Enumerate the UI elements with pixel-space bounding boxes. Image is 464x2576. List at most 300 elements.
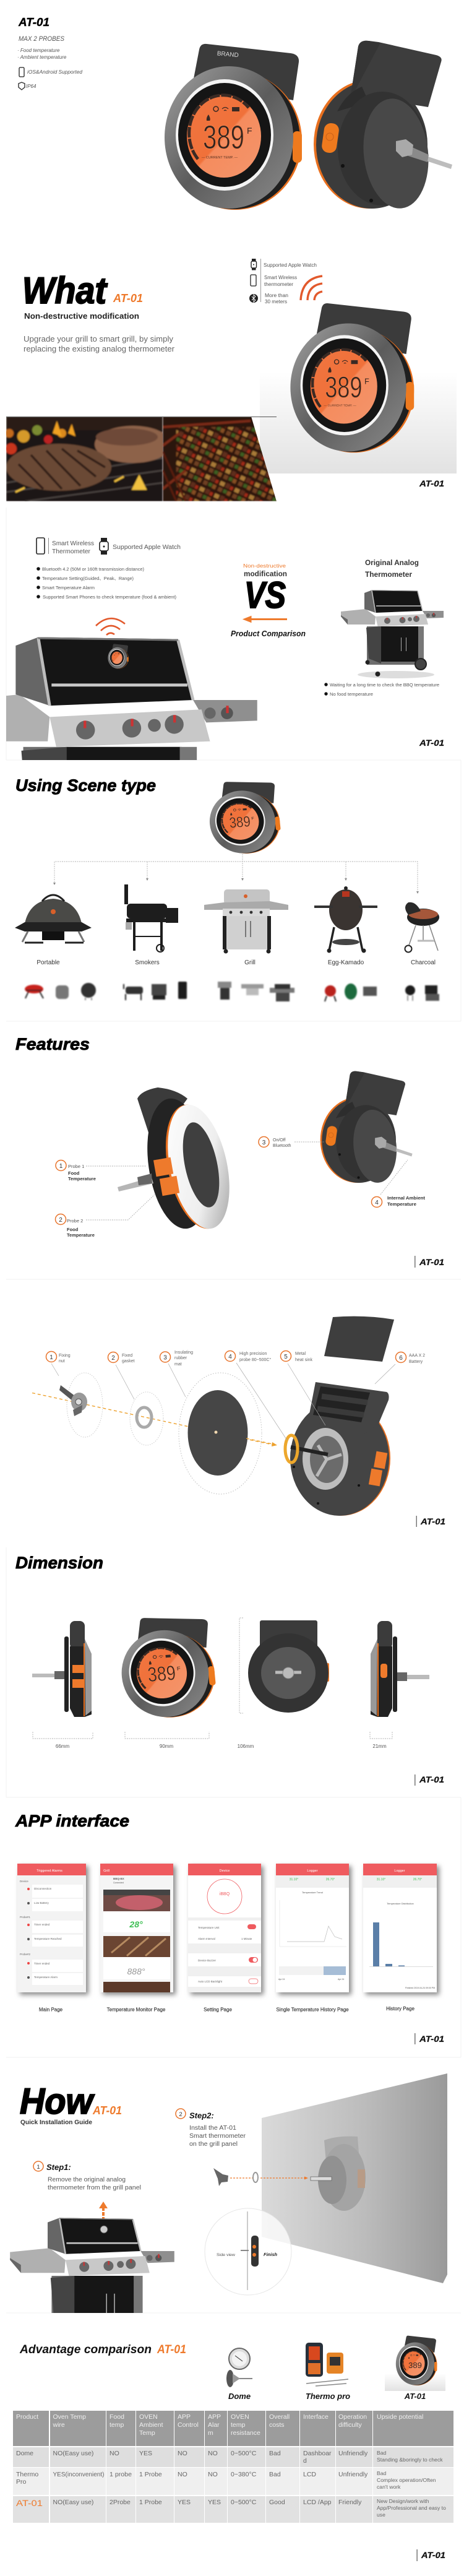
step 1: Step1: xyxy=(46,2163,71,2172)
row: thermo pro: Pro xyxy=(16,2478,26,2486)
divider and feature text xyxy=(260,259,317,305)
row: dome: NO xyxy=(178,2450,187,2457)
heading: Thermometer xyxy=(365,571,413,579)
callout: ambient xyxy=(371,1160,426,1207)
row: dome: d xyxy=(303,2457,307,2465)
bullet list: Waiting for a long time to check the BBQ temperature xyxy=(330,683,439,688)
heading: What xyxy=(22,270,108,311)
bullet list: Smart Temperature Alarm xyxy=(42,585,95,590)
leader lines xyxy=(51,1363,395,1440)
callout labels: Metal xyxy=(295,1352,306,1356)
row: dome: 0~500°C xyxy=(231,2450,257,2457)
icon: bluetooth xyxy=(249,294,258,303)
table header: wire xyxy=(52,2421,65,2429)
label: model tag: AT-01 xyxy=(419,738,444,748)
icon: watch xyxy=(100,538,108,555)
step 1: thermometer from the grill panel xyxy=(48,2185,141,2191)
step 2: 2 xyxy=(179,2111,183,2118)
table header: Oven Temp xyxy=(53,2413,86,2421)
screen captions: Setting Page xyxy=(204,2007,232,2013)
VS: VS xyxy=(244,574,286,616)
row: at-01: YES xyxy=(178,2499,191,2506)
row: dome: Bad xyxy=(377,2450,387,2456)
orange caption: Non-destructive xyxy=(243,563,286,569)
label: model tag xyxy=(415,1256,444,1268)
screen: single history page: Temperature Trend xyxy=(302,1891,323,1894)
step 1: Remove the original analog xyxy=(48,2176,126,2184)
screen: setting page xyxy=(188,1864,264,1995)
product names xyxy=(228,2392,426,2401)
row: thermo pro: Thermo xyxy=(16,2471,38,2478)
thermometer: F xyxy=(251,816,254,821)
label: model tag: AT-01 xyxy=(420,1516,445,1526)
panel: dimension xyxy=(15,1554,444,1786)
callout labels: nut xyxy=(59,1359,65,1364)
screen: setting page: Device xyxy=(220,1869,230,1873)
grill labels: Portable xyxy=(37,959,60,966)
screen: temperature monitor page: 888° xyxy=(127,1966,145,1976)
callout labels: probe 80~500C° xyxy=(239,1357,271,1362)
callout: on off xyxy=(259,1136,325,1148)
table header: difficulty xyxy=(338,2421,362,2429)
callout labels: heat sink xyxy=(295,1358,313,1362)
row: at-01: AT-01 xyxy=(16,2498,43,2508)
panel: features xyxy=(15,1035,444,1268)
divider and feature text: Smart Wireless xyxy=(264,275,297,280)
table header: Interface xyxy=(303,2413,329,2421)
screen: main page: Probe#1 xyxy=(20,1916,31,1919)
label: model tag: AT-01 xyxy=(419,1774,444,1784)
temperature reading: 389 xyxy=(203,119,244,156)
screen captions: Single Temperature History Page xyxy=(276,2007,349,2013)
table header: Food xyxy=(110,2413,124,2421)
feature names: Smart Wireless xyxy=(52,540,94,547)
row: at-01: Good xyxy=(269,2499,285,2506)
view: front xyxy=(116,1613,218,1721)
photo: steak on grill xyxy=(5,417,171,501)
grill labels xyxy=(37,959,436,966)
panel: advantage comparison xyxy=(13,2336,453,2561)
label: model tag: AT-01 xyxy=(421,2550,445,2560)
screen: setting page: Device Buzzer xyxy=(198,1959,217,1962)
screen: temperature monitor page: Connected xyxy=(113,1882,124,1884)
row: thermo pro xyxy=(13,2468,453,2495)
row: at-01: YES xyxy=(208,2499,221,2506)
callout labels: 4 xyxy=(228,1354,232,1360)
heading: Dimension xyxy=(15,1554,103,1572)
screen: single history page: Apr 24 xyxy=(278,1978,285,1981)
screen: single history page xyxy=(276,1864,351,1995)
row: at-01: Friendly xyxy=(338,2499,362,2506)
heading: Using Scene type xyxy=(15,776,156,795)
panel: versus xyxy=(231,563,306,638)
product: dome xyxy=(226,2348,252,2387)
row: at-01: 0~500°C xyxy=(231,2499,257,2506)
arrow up xyxy=(99,2202,108,2224)
temperature reading: 389 xyxy=(325,371,363,404)
row: dome xyxy=(13,2447,453,2467)
grill labels: Grill xyxy=(244,959,256,966)
row: thermo pro: NO xyxy=(178,2471,187,2478)
table header: APP xyxy=(178,2413,191,2421)
callout: probe 1 xyxy=(56,1160,147,1182)
comparison table xyxy=(13,2411,453,2523)
step 2: Smart thermometer xyxy=(189,2133,246,2140)
grill: gas xyxy=(204,889,288,953)
row: at-01: App/Professional and easy to xyxy=(377,2505,446,2511)
illustration: grill xyxy=(341,590,444,678)
callout labels: AAA X 2 xyxy=(409,1354,425,1358)
measurement labels xyxy=(56,1744,387,1749)
screen: setting page: iBBQ xyxy=(220,1892,230,1896)
step 2 xyxy=(176,2109,246,2148)
row: at-01: New Design/work with xyxy=(377,2498,429,2504)
model tag: AT-01 xyxy=(92,2104,122,2117)
screen: history page: 26.70° xyxy=(413,1878,422,1882)
callout: on off: On/Off xyxy=(273,1138,286,1143)
screen: main page: Triggered Alarms xyxy=(37,1869,62,1873)
measurement labels: 21mm xyxy=(372,1744,387,1749)
row: thermo pro: Bad xyxy=(377,2470,387,2476)
divider and feature text: 30 meters xyxy=(265,299,287,305)
screen captions: History Page xyxy=(386,2006,415,2012)
view: right side xyxy=(371,1621,429,1717)
label: model tag xyxy=(416,1516,445,1527)
callout: on off: Bluetooth xyxy=(273,1144,291,1148)
step 1: 1 xyxy=(37,2164,40,2171)
step 2: Install the AT-01 xyxy=(189,2125,236,2132)
grill: smoker xyxy=(124,884,178,952)
row: thermo pro: can't work xyxy=(377,2484,401,2490)
callout labels: Fixing xyxy=(59,1354,71,1358)
grill: charcoal xyxy=(405,902,439,952)
temperature list: · Food temperature xyxy=(17,48,60,53)
panel: hero specs xyxy=(17,16,83,90)
view: front: F xyxy=(176,1666,181,1672)
view: front: 389 xyxy=(147,1662,177,1687)
view: left side xyxy=(32,1621,92,1717)
screen: main page: Temperature Reached xyxy=(34,1937,62,1940)
step 2: on the grill panel xyxy=(189,2141,238,2148)
callout labels xyxy=(46,1351,425,1367)
screen: single history page: Logger xyxy=(307,1869,318,1873)
screen: temperature monitor page: 28° xyxy=(129,1919,143,1929)
screen: history page: Logger xyxy=(394,1869,405,1873)
grill: egg kamado xyxy=(314,886,377,953)
table header xyxy=(13,2411,453,2446)
table header: Operation xyxy=(338,2413,367,2421)
row: thermo pro: Unfriendly xyxy=(338,2471,368,2478)
feature names: Thermometer xyxy=(52,548,90,555)
thermometer: 389 xyxy=(228,814,251,831)
bullet list xyxy=(324,683,439,697)
row: dome: NO xyxy=(208,2450,218,2457)
divider and feature text: More than xyxy=(265,293,288,298)
product: front view xyxy=(165,44,302,210)
panel: original analog xyxy=(324,560,444,748)
connector tree xyxy=(54,854,418,893)
screen: main page xyxy=(17,1864,88,1995)
heading: Features xyxy=(15,1035,90,1053)
screen: main page: Device xyxy=(20,1880,28,1883)
callout: ambient: 4 xyxy=(375,1199,379,1206)
callout labels: High precision xyxy=(239,1352,267,1356)
callout labels: 5 xyxy=(284,1354,288,1360)
panel: how to install xyxy=(10,2073,447,2313)
side view circle: Finish xyxy=(264,2252,278,2257)
model tag: AT-01 xyxy=(157,2343,186,2356)
screen: temperature monitor page: BBQ-BX xyxy=(113,1877,124,1880)
table header: resistance xyxy=(231,2429,260,2437)
screen: setting page: 1 Minute xyxy=(241,1937,252,1940)
screen: single history page: 31.10° xyxy=(290,1878,298,1882)
heading xyxy=(365,560,419,579)
callout: probe 2 xyxy=(56,1195,155,1238)
callout labels: 6 xyxy=(399,1355,403,1362)
row: dome: Dome xyxy=(16,2450,33,2457)
screen: main page: Timer ended xyxy=(34,1923,50,1926)
callout labels: rubber xyxy=(174,1356,187,1360)
feature names xyxy=(48,538,94,555)
callout labels: mat xyxy=(174,1362,182,1367)
row: dome: NO xyxy=(110,2450,119,2457)
product names: AT-01 xyxy=(404,2392,426,2401)
screen: temperature monitor page xyxy=(100,1864,176,1995)
table header: Temp xyxy=(139,2429,155,2437)
heading: Original Analog xyxy=(365,560,419,567)
divider and feature text: Supported Apple Watch xyxy=(264,262,317,268)
row: at-01: NO(Easy use) xyxy=(53,2499,93,2506)
table header: temp xyxy=(110,2421,124,2429)
row: at-01: 2Probe xyxy=(110,2499,131,2506)
label: model tag: AT-01 xyxy=(419,478,444,488)
step 1 xyxy=(33,2161,141,2191)
icon: phone xyxy=(251,275,256,286)
product names: Dome xyxy=(228,2392,251,2401)
device silhouette on panel xyxy=(311,2137,366,2211)
brand label: BRAND xyxy=(217,50,239,59)
label: model tag: AT-01 xyxy=(419,2034,444,2044)
axis arrowhead xyxy=(272,1442,277,1446)
screen: setting page: Alarm Interval xyxy=(198,1937,215,1940)
illustration: side view of device xyxy=(118,1087,239,1235)
side view circle xyxy=(205,2208,291,2295)
icon: shield xyxy=(19,82,25,90)
row: dome: Unfriendly xyxy=(338,2450,368,2457)
bullet list: Temperature Setting(Guided、Peak、Range) xyxy=(42,576,134,581)
product names: Thermo pro xyxy=(306,2392,350,2401)
screen: main page: Disconnection xyxy=(34,1887,52,1890)
model title: AT-01 xyxy=(18,16,49,28)
divider and feature text: thermometer xyxy=(264,282,293,287)
water rating: IP64 xyxy=(26,84,37,89)
callout labels: 3 xyxy=(163,1354,167,1362)
row: thermo pro: LCD xyxy=(303,2471,316,2478)
product comparison: Product Comparison xyxy=(231,629,306,638)
subheading: Non-destructive modification xyxy=(24,311,139,321)
table header: costs xyxy=(269,2421,285,2429)
screen: history page: Temperature Distribution xyxy=(387,1902,414,1905)
callout: on off: 3 xyxy=(262,1139,266,1146)
callout labels: 2 xyxy=(111,1355,115,1362)
screen captions xyxy=(39,2006,415,2013)
screen: history page xyxy=(363,1864,439,1995)
caption: modification xyxy=(244,571,287,578)
step 2: Step2: xyxy=(189,2111,214,2120)
description: Upgrade your grill to smart grill, by simply xyxy=(24,334,174,344)
measurement labels: 90mm xyxy=(160,1744,173,1749)
table header: Upside potential xyxy=(377,2413,423,2421)
table header: m xyxy=(208,2429,213,2437)
icon: wifi arcs xyxy=(301,276,322,300)
table header: Product xyxy=(16,2413,38,2421)
callout: probe 1: 1 xyxy=(59,1163,63,1170)
background gradient xyxy=(260,371,457,473)
part: gasket xyxy=(130,1392,163,1445)
row: thermo pro: 1 probe xyxy=(110,2471,132,2478)
row: dome: Dashboar xyxy=(303,2450,332,2457)
table header: Ambient xyxy=(139,2421,163,2429)
row: thermo pro: Complex operation/Often xyxy=(377,2477,436,2483)
screen: main page: Temperature Alarm xyxy=(34,1976,58,1979)
table header: Overall xyxy=(269,2413,290,2421)
assembly axis xyxy=(32,1393,272,1445)
callout: probe 1: Temperature xyxy=(68,1176,96,1182)
table header: temp xyxy=(231,2421,246,2429)
subheading: Quick Installation Guide xyxy=(20,2119,92,2126)
label: model tag: AT-01 xyxy=(419,1257,444,1267)
row: at-01: LCD /App xyxy=(303,2499,332,2506)
panel: what section xyxy=(22,259,457,473)
heading: APP interface xyxy=(15,1812,129,1830)
row: dome: Bad xyxy=(269,2450,281,2457)
screen captions: Main Page xyxy=(39,2007,63,2013)
grill panel xyxy=(262,2073,447,2283)
model tag: AT-01 xyxy=(113,292,143,305)
part: fixing nut xyxy=(59,1373,103,1437)
screen: history page: 31.10° xyxy=(377,1878,385,1882)
screen: main page: Timer ended xyxy=(34,1962,50,1965)
product: front view with wifi: — CURRENT TEMP. — xyxy=(324,404,356,408)
callout labels: 1 xyxy=(49,1354,53,1361)
part: insulating mat xyxy=(179,1373,262,1494)
screen: single history page: 26.70° xyxy=(326,1878,335,1882)
illustration: back view of device xyxy=(320,1071,413,1185)
icon: watch xyxy=(251,259,256,270)
bullet list: Bluetooth 4.2 (50M or 160ft transmission distance) xyxy=(42,566,144,572)
measurement labels: 106mm xyxy=(238,1744,254,1749)
row: thermo pro: NO xyxy=(208,2471,218,2478)
temperature list: · Ambient temperature xyxy=(17,54,67,60)
panel: exploded view xyxy=(32,1316,445,1527)
label: model tag xyxy=(415,1774,444,1786)
screen captions: Temperature Monitor Page xyxy=(107,2007,166,2013)
measurement brackets xyxy=(33,1618,392,1739)
callout: probe 1: Probe 1 xyxy=(68,1164,84,1169)
callout: probe 1: Food xyxy=(68,1170,80,1176)
callout: probe 2: Temperature xyxy=(67,1232,95,1238)
screen: setting page: Temperature Unit xyxy=(198,1926,220,1929)
row: thermo pro: 0~380°C xyxy=(231,2471,257,2478)
table header: Control xyxy=(178,2421,199,2429)
row: at-01: use xyxy=(377,2512,385,2518)
grill: portable xyxy=(15,895,92,943)
thermometer on lid xyxy=(108,644,129,669)
grill labels: Egg-Kamado xyxy=(328,959,364,966)
icon: phone xyxy=(19,67,24,77)
screen: temperature monitor page: Grill xyxy=(103,1869,110,1873)
thermometer xyxy=(205,778,283,856)
illustration: grill xyxy=(10,2218,174,2313)
panel: smart thermometer features xyxy=(6,537,257,760)
callout labels: gasket xyxy=(122,1359,135,1364)
callout: ambient: Temperature xyxy=(387,1201,416,1207)
bullet list: Supported Smart Phones to check temperature (food & ambient) xyxy=(43,594,177,600)
part: device body xyxy=(285,1382,390,1516)
table header: OVEN xyxy=(139,2413,158,2421)
screen: main page: Low Battery xyxy=(34,1901,49,1904)
screen: history page: Finished 2019-04-24 09:00 PM xyxy=(405,1987,435,1989)
description: replacing the existing analog thermometer xyxy=(24,344,175,353)
watch support: Supported Apple Watch xyxy=(113,543,181,551)
install parts and arrows xyxy=(213,2168,308,2186)
part: battery cover xyxy=(324,1316,394,1362)
product: at-01 xyxy=(385,2336,445,2391)
grill labels: Charcoal xyxy=(411,959,436,966)
product: front view: F xyxy=(247,126,252,136)
row: dome: YES xyxy=(139,2450,152,2457)
screen: single history page: Apr 24 xyxy=(338,1978,344,1981)
panel: app interface xyxy=(15,1812,444,2044)
product: back view xyxy=(314,41,452,212)
callout: probe 2: Food xyxy=(67,1227,79,1232)
callout: probe 2: Probe 2 xyxy=(67,1218,83,1224)
callout: probe 2: 2 xyxy=(59,1217,62,1224)
platform support: iOS&Android Supported xyxy=(27,69,83,75)
table header: Alar xyxy=(208,2421,220,2429)
callout labels: Insulating xyxy=(174,1351,193,1355)
screen: setting page: Auto LCD Backlight xyxy=(198,1980,223,1983)
icon: wifi arcs xyxy=(96,618,125,635)
probes heading: MAX 2 PROBES xyxy=(19,35,65,43)
row: thermo pro: 1 Probe xyxy=(139,2471,162,2478)
row: dome: Standing &boringly to check xyxy=(377,2457,443,2463)
side view circle: Side view xyxy=(217,2253,235,2257)
arrow xyxy=(245,617,287,621)
product: thermo pro xyxy=(306,2343,348,2386)
panel: using scene type xyxy=(15,776,439,1001)
callout: ambient: Internal Ambient xyxy=(387,1195,426,1201)
table header: APP xyxy=(208,2413,221,2421)
product: at-01: 389 xyxy=(408,2361,422,2370)
row: thermo pro: Bad xyxy=(269,2471,281,2478)
temperature list xyxy=(17,48,67,60)
screen: main page: Probe#2 xyxy=(20,1953,31,1956)
row: dome: NO(Easy use) xyxy=(53,2450,93,2457)
product: front view with wifi xyxy=(290,303,414,452)
heading: Advantage comparison xyxy=(19,2343,152,2356)
arrowheads xyxy=(53,878,419,894)
label: model tag xyxy=(415,2033,444,2044)
axis arrow xyxy=(246,1438,272,1444)
heading: How xyxy=(20,2081,95,2122)
view: back xyxy=(248,1620,329,1713)
label: model tag xyxy=(417,2549,445,2561)
row: at-01 xyxy=(13,2496,453,2523)
icon: phone xyxy=(37,538,45,554)
product: front view: — CURRENT TEMP. — xyxy=(202,156,238,160)
callout labels: Fixed xyxy=(122,1354,132,1358)
